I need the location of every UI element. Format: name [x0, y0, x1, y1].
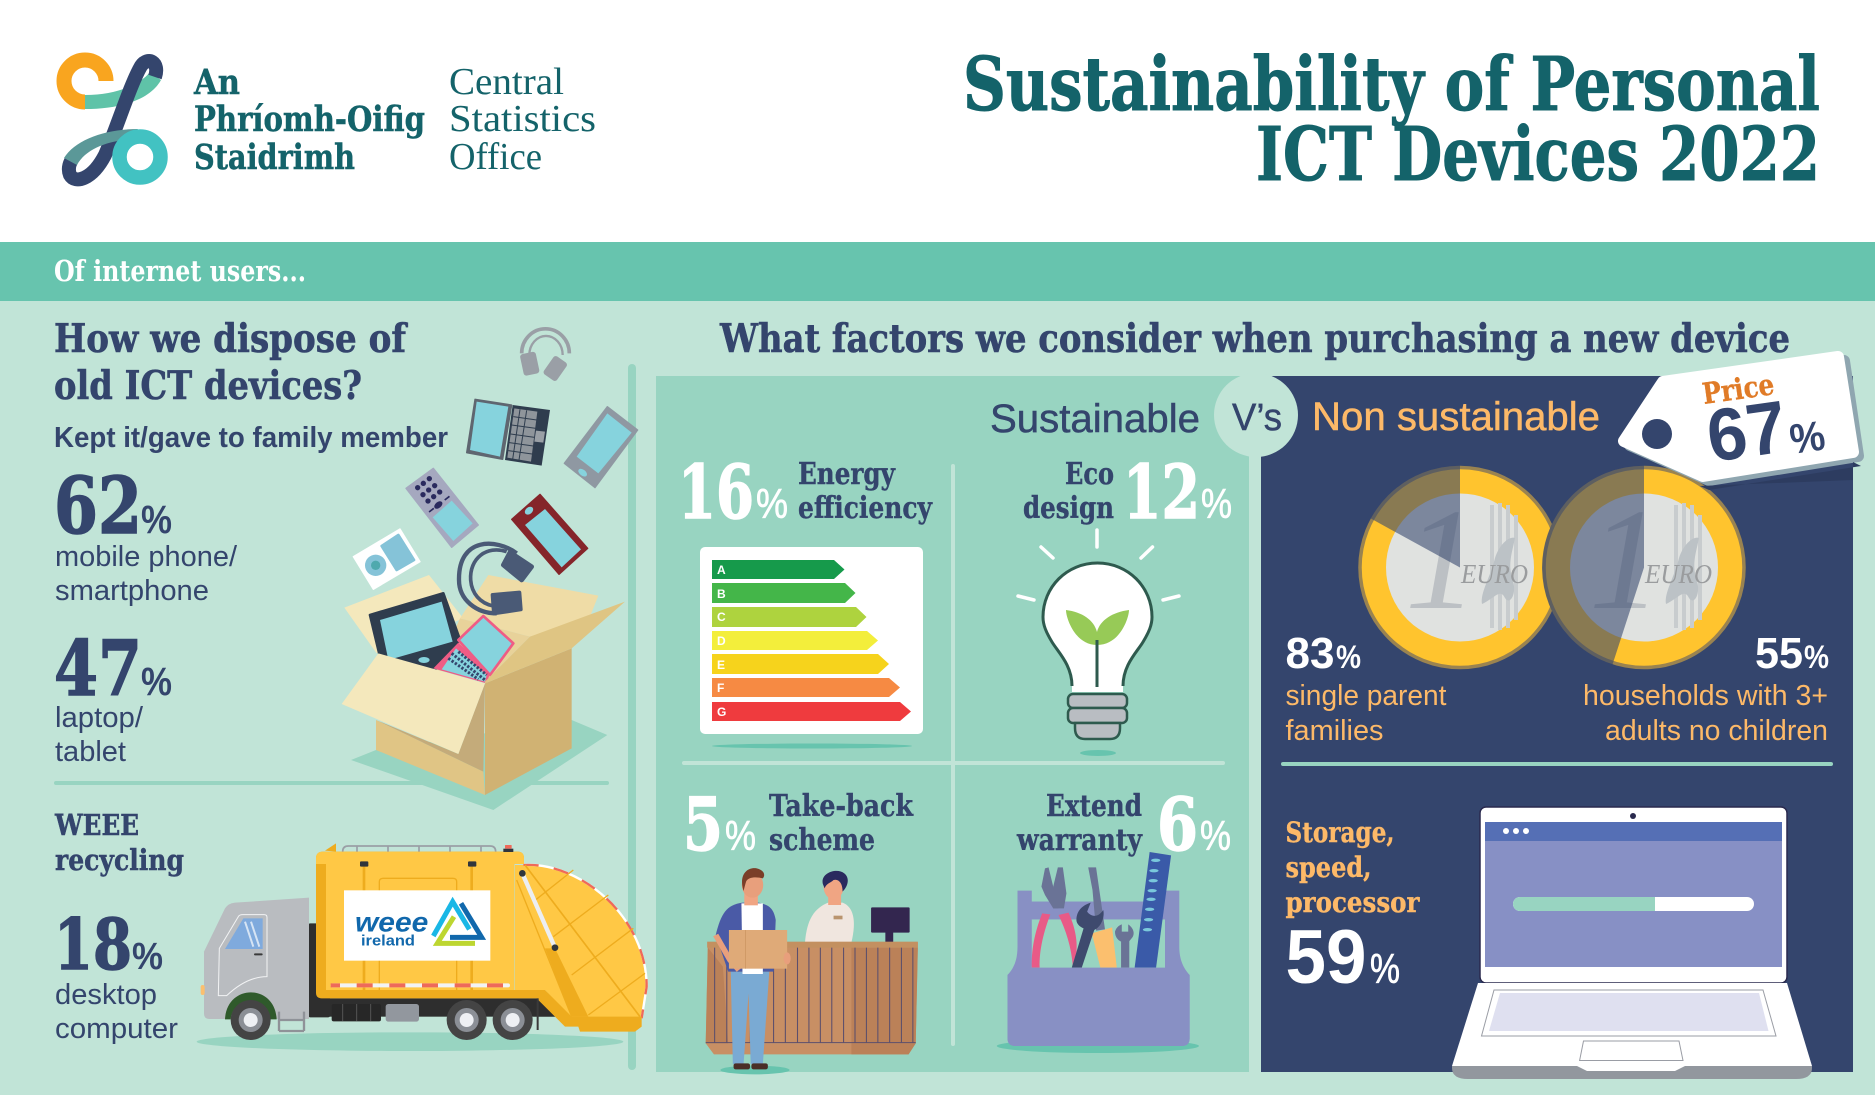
- chart: energy rating label: F: [717, 681, 724, 695]
- icon: customer at returns counter: [706, 868, 918, 1074]
- stat: 59% storage speed processor: 59: [1286, 915, 1366, 1000]
- screwdriver: [1088, 867, 1117, 968]
- icon: box of devices: [342, 329, 638, 810]
- truck wheels: [231, 1000, 533, 1040]
- stat: 6% extend warranty: %: [1200, 812, 1231, 859]
- stat: 18% desktop: %: [132, 936, 163, 978]
- customer carrying box: [716, 868, 791, 1074]
- stat: 12% eco design: [1023, 450, 1232, 536]
- logo text: English name: Statistics: [449, 98, 596, 140]
- stat: 47% laptop: 47: [54, 624, 142, 713]
- heading: disposal: [54, 316, 408, 409]
- stat: 16% energy efficiency: Energy: [798, 457, 896, 492]
- pliers: [1032, 867, 1077, 968]
- stat: 6% extend warranty: Extend: [1046, 789, 1142, 824]
- stat: 12% eco design: 12: [1123, 450, 1200, 536]
- heading: disposal: old ICT devices?: [54, 363, 362, 409]
- chart: energy rating label: [700, 547, 923, 748]
- stat: 16% energy efficiency: efficiency: [798, 491, 933, 526]
- stat: 18% desktop: 18: [54, 903, 132, 986]
- stat: 83% single parent families: families: [1286, 715, 1384, 747]
- band: of internet users: Of internet users...: [54, 254, 306, 288]
- icon: toolbox: [997, 852, 1199, 1053]
- stat: 59% storage speed processor: speed,: [1286, 851, 1372, 884]
- stat: 12% eco design: Eco: [1065, 457, 1114, 492]
- stat: 5% take-back scheme: %: [725, 812, 756, 859]
- stat: 6% extend warranty: [1016, 782, 1231, 868]
- logo text: English name: Central: [449, 61, 564, 103]
- title: [963, 42, 1820, 198]
- stat: 59% storage speed processor: processor: [1286, 886, 1421, 919]
- logo text: Irish name: An: [193, 62, 240, 103]
- price tag: 67%: %: [1787, 411, 1828, 463]
- stat: 5% take-back scheme: [683, 782, 914, 868]
- chart: energy rating label: A: [717, 563, 726, 577]
- price tag: 67%: Price: [1700, 367, 1776, 411]
- stat: 59% storage speed processor: Storage,: [1286, 816, 1394, 849]
- subheading: WEEE recycling: [54, 808, 184, 877]
- stat: 18% desktop: [54, 903, 178, 1045]
- heading: disposal: How we dispose of: [54, 316, 408, 362]
- stat: 55% households: households with 3+: [1583, 680, 1828, 712]
- icon: grey headphones: [520, 329, 569, 382]
- stat: 18% desktop: desktop: [55, 979, 157, 1011]
- ruler: [1135, 852, 1171, 968]
- stat: 6% extend warranty: 6: [1157, 782, 1198, 868]
- stat: 55% households: %: [1804, 639, 1829, 675]
- panel: disposal of old devices: [54, 316, 647, 1070]
- icon: red phone: [512, 494, 588, 574]
- stat: 16% energy efficiency: %: [756, 480, 788, 527]
- stat: 5% take-back scheme: scheme: [769, 823, 875, 858]
- panel: sustainable factors: [656, 376, 1249, 1074]
- chart: euro coin 83 percent: 1: [1405, 480, 1478, 640]
- stat: 59% storage speed processor: %: [1370, 945, 1400, 992]
- logo text: Irish name: [193, 62, 425, 178]
- stat: 5% take-back scheme: 5: [683, 782, 723, 868]
- stat: 62% mobile: 62: [54, 461, 142, 552]
- stat: 83% single parent families: [1286, 629, 1446, 747]
- stat: 62% mobile: mobile phone/: [55, 541, 238, 573]
- weee ireland logo: weee: [355, 907, 428, 938]
- logo text: English name: Office: [449, 136, 542, 178]
- icon: tablet in box: [370, 593, 460, 668]
- wrench: [1072, 903, 1104, 968]
- chart: energy rating label: C: [717, 610, 726, 624]
- stat: 16% energy efficiency: 16: [678, 450, 754, 536]
- icon: recycling truck: [197, 843, 647, 1051]
- icon: dark headphones: [459, 544, 532, 613]
- logo text: Irish name: Staidrimh: [194, 137, 355, 178]
- weee ireland logo: [344, 890, 490, 961]
- stat: 59% storage speed processor: [1286, 816, 1421, 1000]
- counter: [706, 942, 918, 1054]
- stat: 6% extend warranty: warranty: [1016, 823, 1143, 858]
- icon: open laptop: [467, 399, 550, 466]
- subheading: WEEE recycling: WEEE: [54, 808, 139, 842]
- badge: V's: V’s: [1232, 397, 1282, 439]
- icon: laptop with progress bar: [1452, 807, 1812, 1079]
- stat: 12% eco design: design: [1023, 491, 1114, 526]
- price tag: 67%: [1624, 357, 1861, 490]
- stat: 18% desktop: computer: [55, 1013, 178, 1045]
- icon: logo mark: [64, 60, 161, 179]
- stat: 62% mobile: smartphone: [55, 575, 209, 607]
- stat: 55% households: [1583, 629, 1829, 747]
- chart: energy rating label: D: [717, 634, 726, 648]
- subheading: kept it: Kept it/gave to family member: [54, 422, 448, 454]
- header logo: [64, 60, 596, 179]
- stat: 55% households: 55: [1755, 629, 1803, 678]
- heading: sustainable: Sustainable: [990, 397, 1200, 441]
- band: of internet users: [0, 242, 1875, 301]
- stat: 47% laptop: [54, 624, 172, 768]
- stat: 47% laptop: %: [141, 660, 172, 704]
- chart: euro coin 55 percent: 1: [1589, 480, 1662, 640]
- price tag: 67%: 67: [1702, 385, 1791, 478]
- stat: 62% mobile: [54, 461, 238, 607]
- icon: light bulb with leaves: [1018, 530, 1179, 756]
- truck body: [316, 843, 642, 1032]
- stat: 47% laptop: laptop/: [55, 702, 144, 734]
- icon: music player: [353, 529, 420, 589]
- small wrench: [1115, 924, 1134, 968]
- icon: keypad phone: [406, 468, 478, 547]
- stat: 12% eco design: %: [1201, 480, 1232, 527]
- logo text: Irish name: Phríomh-Oifig: [194, 99, 425, 140]
- logo text: English name: [449, 61, 596, 178]
- badge: V's: [1214, 373, 1298, 457]
- panel: non sustainable factors: [1261, 376, 1853, 1079]
- stat: 83% single parent families: 83: [1286, 629, 1334, 678]
- chart: energy rating label: B: [717, 587, 726, 601]
- stat: 83% single parent families: single parent: [1286, 680, 1446, 712]
- chart: euro coin 83 percent: [1360, 466, 1560, 668]
- stat: 16% energy efficiency: [678, 450, 933, 536]
- truck compactor rear: [515, 865, 647, 1018]
- stat: 47% laptop: tablet: [55, 736, 126, 768]
- monitor: [871, 907, 910, 942]
- icon: grey phone: [564, 407, 638, 488]
- weee ireland logo: ireland: [361, 933, 415, 949]
- chart: energy rating label: E: [717, 658, 725, 672]
- stat: 62% mobile: %: [141, 498, 172, 542]
- heading: non sustainable: Non sustainable: [1312, 395, 1600, 439]
- subheading: WEEE recycling: recycling: [55, 843, 184, 877]
- chart: euro coin 55 percent: EURO: [1644, 559, 1712, 589]
- stat: 55% households: adults no children: [1605, 715, 1828, 747]
- stat: 5% take-back scheme: Take-back: [769, 789, 914, 824]
- chart: euro coin 83 percent: EURO: [1460, 559, 1528, 589]
- chart: euro coin 55 percent: [1542, 466, 1744, 668]
- clerk: [805, 871, 854, 942]
- stat: 83% single parent families: %: [1336, 639, 1361, 675]
- chart: energy rating label: G: [717, 705, 726, 719]
- truck underside: [332, 998, 538, 1030]
- icon: pink laptop in box: [433, 616, 513, 683]
- truck cab: [201, 898, 309, 1031]
